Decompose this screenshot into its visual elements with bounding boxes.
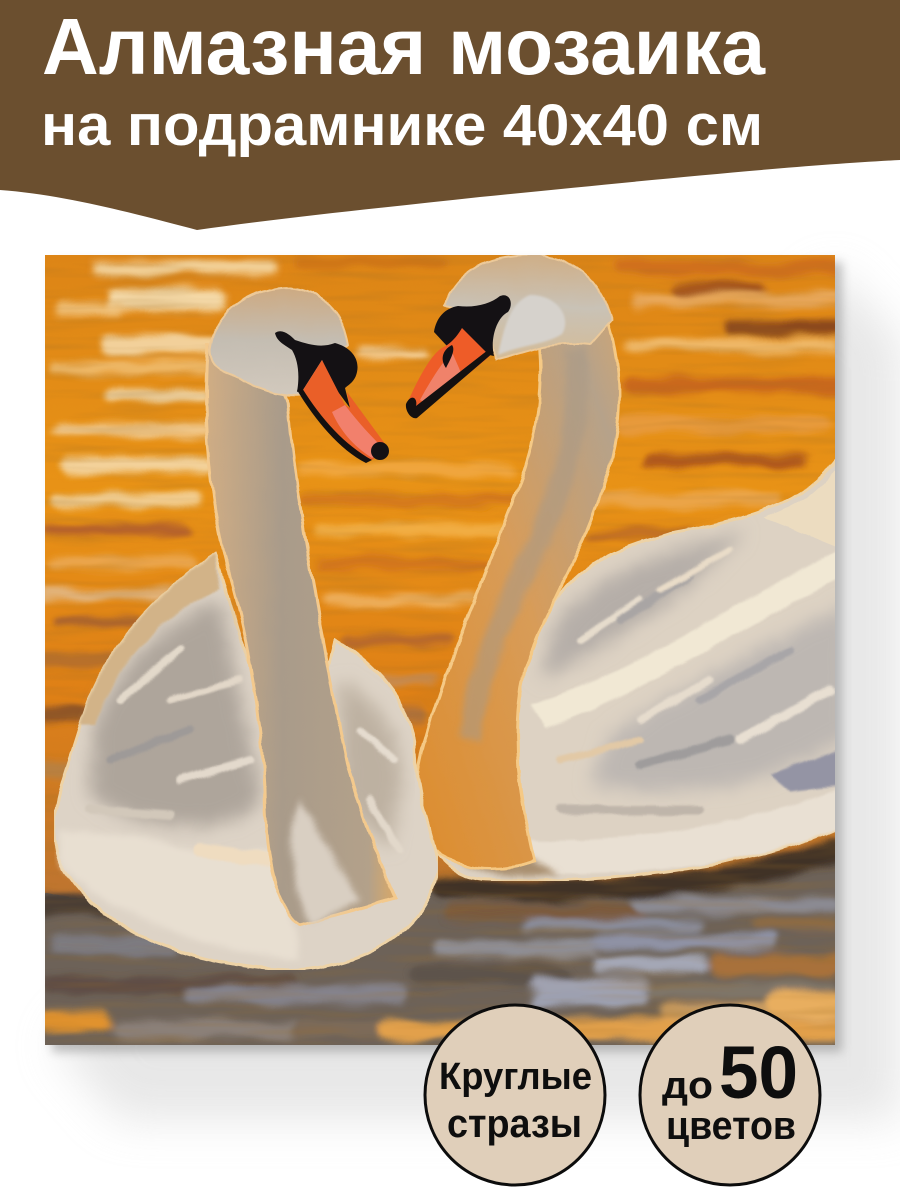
left swan beak bbox=[303, 360, 388, 460]
left swan black mask bbox=[275, 331, 358, 408]
badge: up to 50 colours: 50 bbox=[719, 1031, 798, 1114]
title: Алмазная мозаика bbox=[42, 2, 765, 91]
right swan neck bbox=[417, 290, 619, 869]
badge: round rhinestones bbox=[425, 1005, 605, 1185]
left swan wing shading bbox=[60, 555, 402, 960]
badge: up to 50 colours: цветов bbox=[666, 1104, 796, 1148]
right swan head bbox=[445, 255, 612, 360]
left swan head bbox=[210, 287, 348, 395]
dark lake at the bottom bbox=[30, 845, 850, 1060]
right swan feather strokes bbox=[560, 550, 830, 810]
subtitle: на подрамнике 40х40 см bbox=[41, 93, 763, 158]
left swan feather strokes bbox=[90, 650, 400, 860]
orange sunset water bbox=[45, 255, 835, 899]
right swan tail bbox=[764, 471, 835, 546]
badge: up to 50 colours: до bbox=[662, 1065, 713, 1107]
right swan wing shading bbox=[445, 530, 850, 876]
left swan bill tip bbox=[371, 442, 389, 460]
left swan neck bbox=[206, 340, 396, 925]
left swan bbox=[54, 287, 438, 970]
canvas shadow bbox=[52, 262, 900, 1120]
right swan bbox=[406, 255, 850, 881]
left swan body bbox=[54, 555, 438, 970]
right swan beak bbox=[409, 328, 490, 406]
badge: up to 50 colours bbox=[640, 1005, 820, 1185]
badge: round rhinestones: стразы bbox=[447, 1102, 582, 1146]
right swan black mask bbox=[434, 295, 511, 356]
painting: two swans at sunset bbox=[30, 240, 850, 1060]
header banner bbox=[0, 0, 900, 230]
badge: round rhinestones: Круглые bbox=[439, 1056, 592, 1098]
brush texture bbox=[45, 255, 835, 1045]
right swan body bbox=[438, 459, 835, 881]
